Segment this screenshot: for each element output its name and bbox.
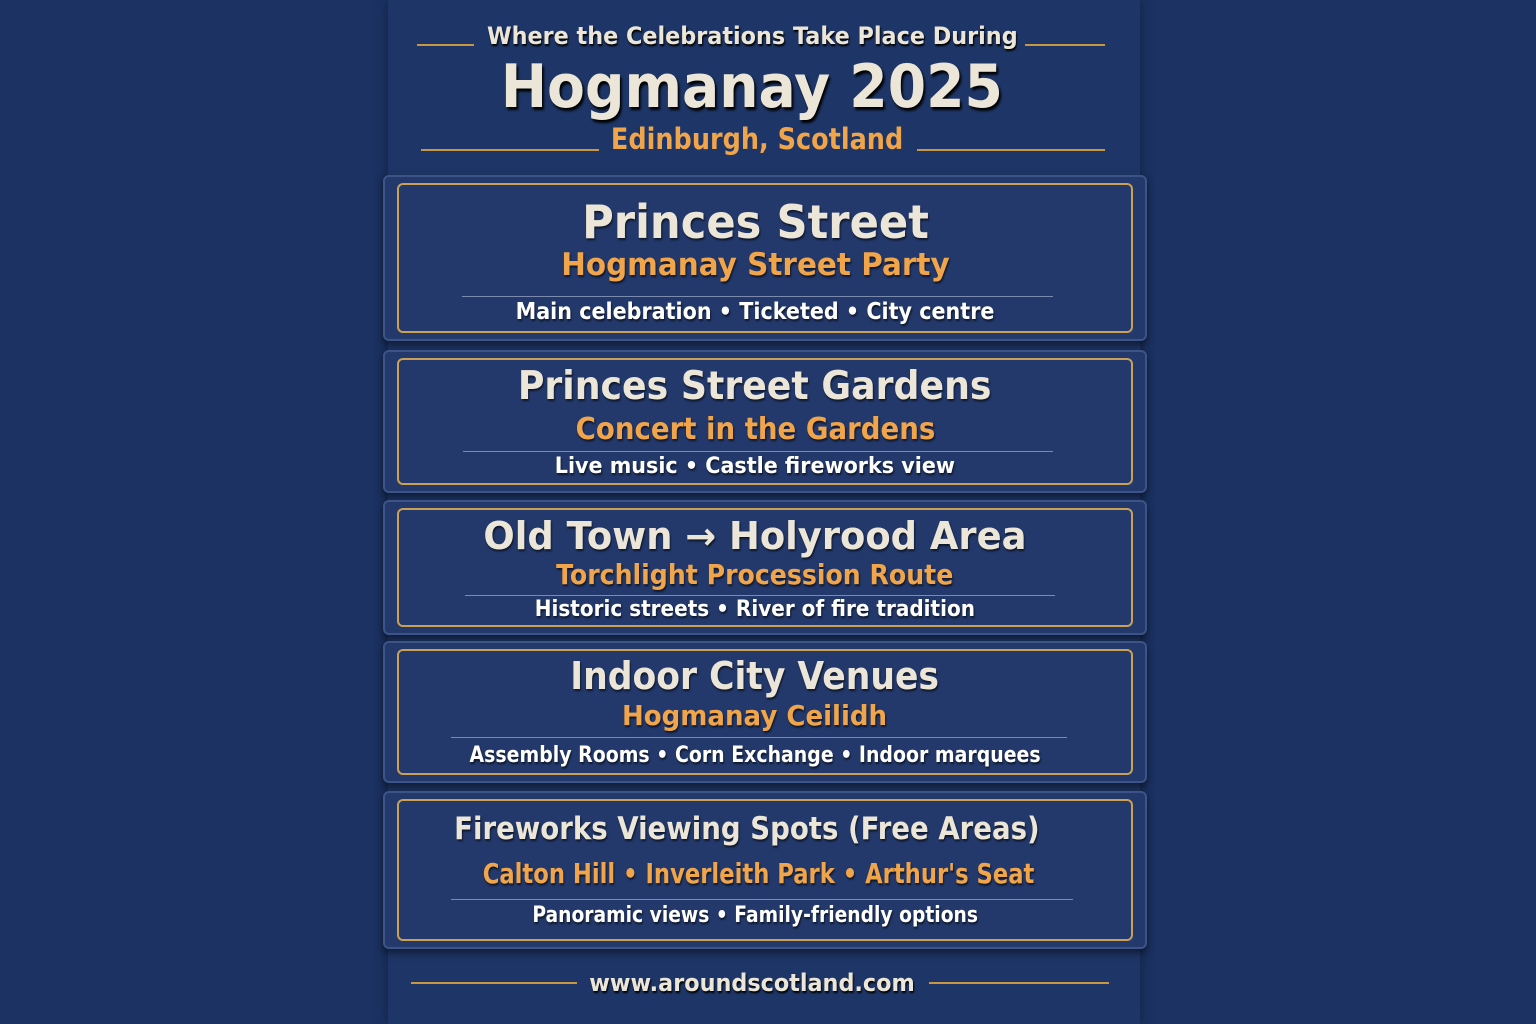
panel: Old Town: [383, 500, 1147, 635]
location: Edinburgh, Scotland: [611, 122, 903, 156]
panel: Fireworks: Fireworks Viewing Spots (Free Areas): [454, 811, 1040, 847]
panel: Gardens: Concert in the Gardens: [575, 412, 935, 447]
panel: Fireworks: Calton Hill • Inverleith Park • Arthur's Seat: [483, 857, 1035, 890]
panel: Indoor venues: Assembly Rooms • Corn Exchange • Indoor marquees: [469, 743, 1041, 768]
panel: Princes Street: Hogmanay Street Party: [561, 247, 949, 283]
panel: Old Town: Old Town → Holyrood Area: [483, 514, 1027, 558]
subtitle: Where the Celebrations Take Place During: [487, 22, 1017, 50]
panel: Indoor venues: [383, 641, 1147, 783]
panel: Princes Street: [383, 175, 1147, 341]
header: [417, 22, 1105, 156]
panel: Fireworks: [383, 791, 1147, 949]
title: Hogmanay 2025: [501, 52, 1003, 122]
footer: www.aroundscotland.com: [589, 969, 915, 997]
panel: Indoor venues: Indoor City Venues: [571, 654, 939, 698]
panel: Fireworks: Panoramic views • Family-friendly options: [532, 903, 978, 928]
panel: Old Town: Historic streets • River of fire tradition: [535, 597, 975, 622]
panel: Gardens: [383, 350, 1147, 493]
panel: Old Town: Torchlight Procession Route: [556, 558, 954, 591]
panel: Gardens: Live music • Castle fireworks view: [555, 454, 955, 479]
panel: Princes Street: Main celebration • Ticketed • City centre: [516, 299, 994, 325]
panel: Gardens: Princes Street Gardens: [518, 364, 992, 409]
panel: Indoor venues: Hogmanay Ceilidh: [622, 699, 888, 732]
panel: Princes Street: Princes Street: [582, 195, 928, 249]
